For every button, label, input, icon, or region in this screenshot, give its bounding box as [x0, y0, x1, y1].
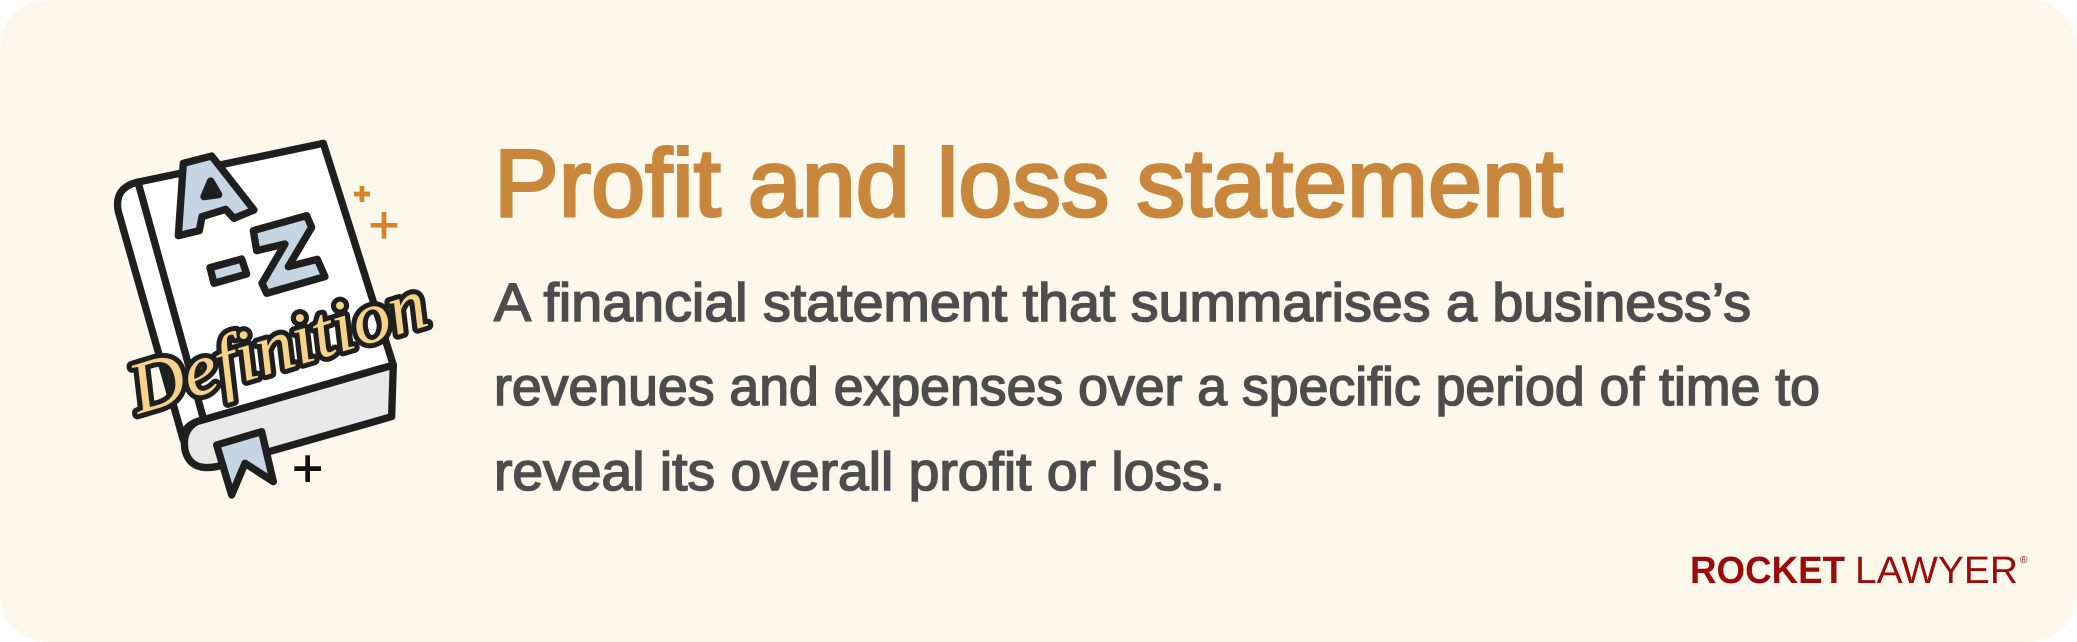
letter A [178, 156, 254, 236]
logo: Rocket Lawyer [1690, 550, 2028, 592]
icon: A-Z definition book [118, 143, 436, 495]
body text [494, 273, 1820, 502]
body text: revenues and expenses over a specific period of time to [494, 357, 1820, 417]
logo: Rocket Lawyer: LAWYER [1855, 550, 2018, 592]
sparkles [354, 186, 397, 239]
Definition script text: Definition [118, 262, 436, 430]
book pages [184, 365, 393, 468]
body text: reveal its overall profit or loss. [494, 442, 1225, 502]
bookmark [217, 432, 273, 495]
title: Profit and loss statement [494, 130, 1563, 237]
book cover [118, 143, 393, 440]
logo: Rocket Lawyer: ROCKET [1690, 550, 1845, 592]
logo: Rocket Lawyer: ® [2020, 555, 2028, 566]
dash [210, 259, 247, 283]
letter Z [253, 216, 325, 293]
body text: A financial statement that summarises a business’s [494, 273, 1751, 333]
